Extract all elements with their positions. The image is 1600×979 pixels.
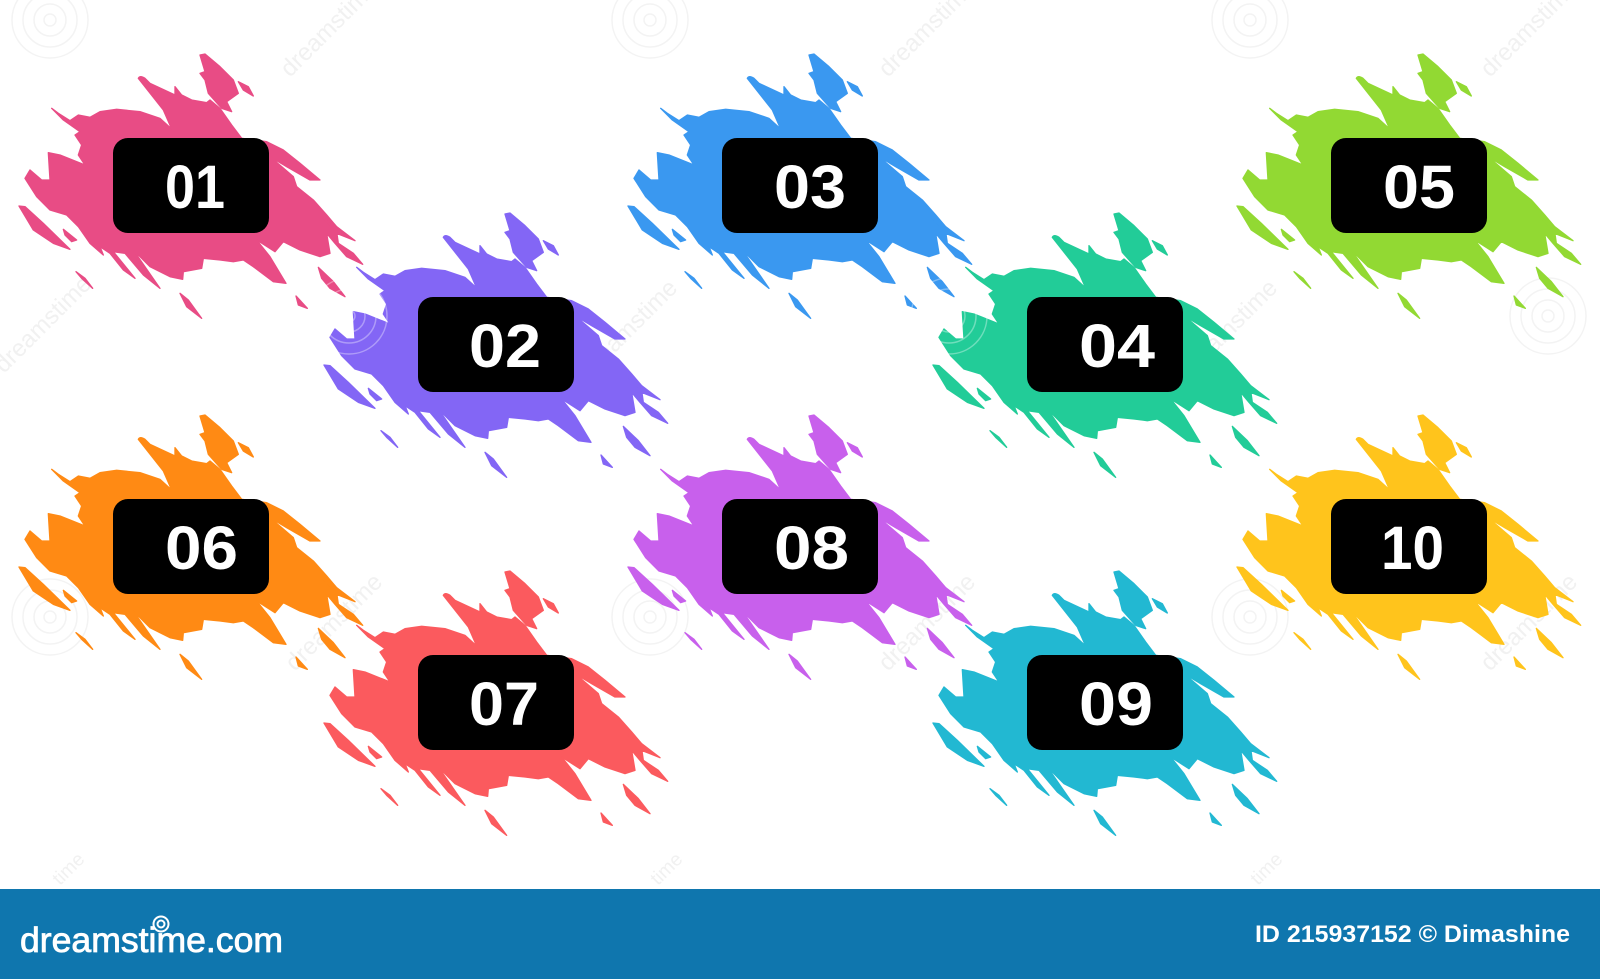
logo text: dreamstime.com (20, 921, 283, 960)
badge 01 (19, 54, 363, 318)
badge 05 (1237, 54, 1581, 318)
footer bar (0, 889, 1600, 979)
number 07: 07 (469, 670, 539, 738)
badge 02 (324, 213, 668, 477)
badge 03 (628, 54, 972, 318)
watermark spirals (12, 0, 1586, 655)
watermark spirals over brushes (311, 278, 987, 354)
number 09: 09 (1079, 670, 1153, 738)
watermark text: dreamstime (280, 568, 388, 676)
number 03: 03 (774, 153, 846, 221)
brush: orange (19, 415, 363, 679)
image credit: ID 215937152 © Dimashine (1255, 921, 1570, 948)
number 06: 06 (165, 514, 238, 582)
badge 08 (628, 415, 972, 679)
brush: lime (1237, 54, 1581, 318)
label box 01 (113, 138, 269, 233)
label box 04 (1027, 297, 1183, 392)
badge 10 (1237, 415, 1581, 679)
badge 06 (19, 415, 363, 679)
number 02: 02 (469, 312, 541, 380)
label box 05 (1331, 138, 1487, 233)
watermark text: dreamstime (873, 568, 981, 676)
brush: yellow (1237, 415, 1581, 679)
label box 06 (113, 499, 269, 594)
label box 09 (1027, 655, 1183, 750)
brush: green teal (933, 213, 1277, 477)
number 05: 05 (1383, 153, 1455, 221)
label box 08 (722, 499, 878, 594)
watermark text: time (49, 849, 89, 890)
label box 10 (1331, 499, 1487, 594)
watermark text: dreamstime (1475, 568, 1583, 676)
badge 07 (324, 571, 668, 835)
watermark text: dreamstime (1175, 274, 1283, 382)
brush: pink (19, 54, 363, 318)
watermark text: time (1247, 849, 1287, 890)
icon: logo spiral (154, 916, 168, 932)
label box 07 (418, 655, 574, 750)
brush: purple (628, 415, 972, 679)
number 01: 01 (165, 153, 225, 221)
number 10: 10 (1381, 514, 1444, 582)
brush: cyan (933, 571, 1277, 835)
badge 04 (933, 213, 1277, 477)
label box 03 (722, 138, 878, 233)
brush: coral (324, 571, 668, 835)
label box 02 (418, 297, 574, 392)
number 08: 08 (774, 514, 849, 582)
badge 09 (933, 571, 1277, 835)
brush: violet (324, 213, 668, 477)
brush: blue (628, 54, 972, 318)
number 04: 04 (1079, 312, 1155, 380)
watermark text: dreamstime (575, 274, 683, 382)
watermark text: time (647, 849, 687, 890)
